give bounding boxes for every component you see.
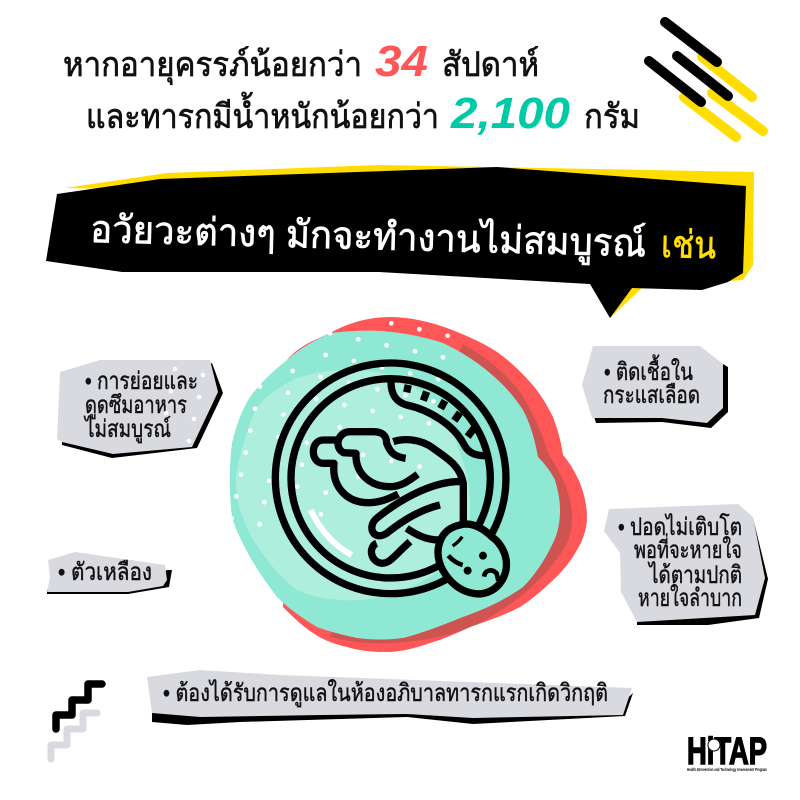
banner text: เช่น: [661, 224, 717, 267]
red blob: [283, 317, 587, 652]
card text: • ตัวเหลือง: [58, 559, 152, 586]
title: second line: และทารกมีน้ำหนักน้อยกว่า: [86, 92, 439, 136]
card text: [603, 354, 700, 409]
card text: [618, 513, 742, 612]
card: NICU: [147, 670, 633, 725]
card text: • ต้องได้รับการดูแลในห้องอภิบาลทารกแรกเกิดวิกฤติ: [163, 679, 608, 708]
banner text: อวัยวะต่างๆ มักจะทำงานไม่สมบูรณ์: [90, 208, 647, 267]
banner: speech bubble: [46, 165, 754, 318]
card text: ไม่สมบูรณ์: [83, 415, 171, 444]
white dots: [229, 321, 450, 527]
card: digestion: [57, 360, 223, 458]
title: first line: หากอายุครรภ์น้อยกว่า: [63, 46, 362, 85]
title: first line: สัปดาห์: [442, 46, 539, 84]
fetus line icon: [275, 363, 506, 594]
icon: diagonal stripes: [649, 22, 763, 137]
card text: • การย่อยและ: [85, 368, 198, 395]
card: lungs: [604, 504, 768, 625]
card text: • ติดเชื้อใน: [604, 354, 693, 386]
card text: หายใจลำบาก: [638, 584, 742, 612]
illustration: fetus in blob: [229, 317, 587, 652]
card text: ดูดซึมอาหาร: [85, 392, 187, 420]
logo: HiTAP: HiTAP: [687, 731, 767, 773]
title: first line: 34: [375, 37, 428, 86]
title: second line: [86, 89, 640, 138]
title: first line: [63, 37, 539, 86]
card text: กระแสเลือด: [603, 382, 700, 409]
light inner highlight: [236, 370, 470, 600]
title: second line: 2,100: [450, 89, 571, 138]
card text: พอที่จะหายใจ: [634, 533, 742, 564]
title: second line: กรัม: [584, 98, 640, 136]
card dots: [164, 367, 205, 443]
card text: • ปอดไม่เติบโต: [618, 513, 742, 541]
card text: ได้ตามปกติ: [647, 561, 742, 589]
ball: [438, 524, 506, 594]
card: jaundice: [47, 552, 172, 594]
teal blob: [230, 331, 560, 640]
icon: stair zigzags: [51, 684, 102, 759]
dark shadow blob: [330, 345, 572, 643]
card: bloodstream infection: [582, 346, 728, 428]
card text: [83, 368, 198, 444]
